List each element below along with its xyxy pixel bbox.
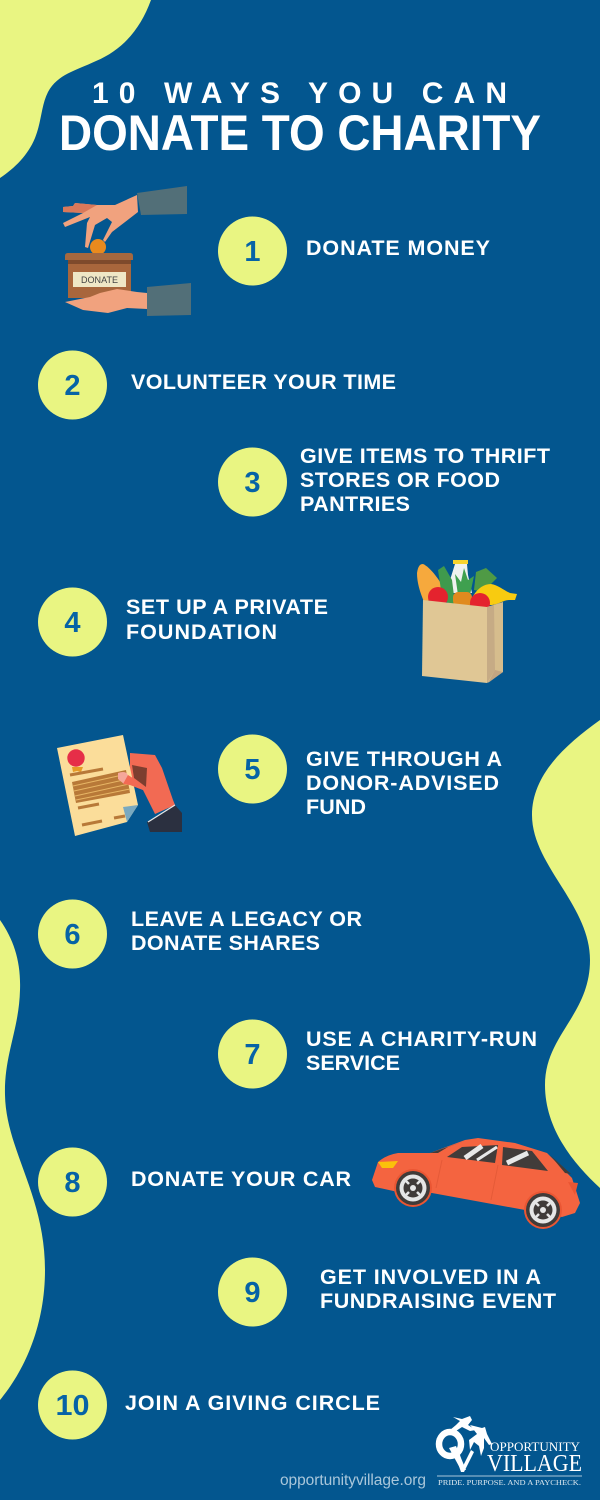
step 3: 3: [244, 467, 261, 499]
step 5: FUND: [306, 795, 366, 819]
logo: Opportunity Village: [437, 1416, 582, 1487]
blob: top left: [0, 0, 151, 178]
step 9: GET INVOLVED IN A: [320, 1265, 541, 1289]
step 3: STORES OR FOOD: [300, 468, 500, 492]
step 1: 1: [244, 236, 261, 268]
step 4: 4: [64, 607, 81, 639]
step 3: GIVE ITEMS TO THRIFT: [300, 444, 550, 468]
title: 10 WAYS YOU CAN: [92, 77, 507, 110]
website url: opportunityvillage.org: [280, 1472, 426, 1489]
step 7: SERVICE: [306, 1051, 400, 1075]
icon: red car: [372, 1138, 580, 1229]
icon: grocery bag: [417, 560, 517, 683]
step 7: 7: [244, 1039, 261, 1071]
step 1: [218, 216, 490, 286]
step 4: SET UP A PRIVATE: [126, 595, 328, 619]
step 5: 5: [244, 754, 261, 786]
step 7: USE A CHARITY-RUN: [306, 1027, 537, 1051]
step 8: DONATE YOUR CAR: [131, 1167, 351, 1191]
step 10: JOIN A GIVING CIRCLE: [125, 1391, 380, 1415]
icon: donation box: DONATE: [81, 275, 118, 286]
logo: Opportunity Village: OPPORTUNITY: [490, 1439, 581, 1454]
title: [59, 77, 541, 161]
step 10: 10: [56, 1390, 90, 1422]
step 8: 8: [64, 1167, 81, 1199]
step 4: [38, 588, 328, 656]
step 1: DONATE MONEY: [306, 236, 490, 260]
logo: Opportunity Village: VILLAGE: [487, 1451, 582, 1477]
title: DONATE TO CHARITY: [59, 105, 541, 161]
blob: lower left: [0, 920, 45, 1400]
step 7: [218, 1020, 537, 1088]
step 2: VOLUNTEER YOUR TIME: [131, 370, 396, 394]
step 6: [38, 900, 362, 968]
step 2: 2: [64, 370, 81, 402]
step 2: [38, 350, 396, 420]
step 5: GIVE THROUGH A: [306, 747, 502, 771]
step 5: [218, 734, 502, 819]
blob: right: [532, 720, 600, 1188]
step 6: DONATE SHARES: [131, 931, 320, 955]
step 5: DONOR-ADVISED: [306, 771, 499, 795]
logo: Opportunity Village: PRIDE. PURPOSE. AND A PAYCHECK.: [438, 1478, 581, 1487]
step 4: FOUNDATION: [126, 620, 277, 644]
step 10: [38, 1370, 380, 1440]
step 9: FUNDRAISING EVENT: [320, 1289, 556, 1313]
step 8: [38, 1148, 351, 1216]
step 9: [218, 1258, 556, 1326]
step 3: PANTRIES: [300, 492, 410, 516]
step 3: [218, 444, 550, 516]
icon: donation box: [63, 186, 191, 316]
step 6: LEAVE A LEGACY OR: [131, 907, 362, 931]
step 9: 9: [244, 1277, 261, 1309]
step 6: 6: [64, 919, 81, 951]
icon: document in hand: [57, 735, 182, 836]
